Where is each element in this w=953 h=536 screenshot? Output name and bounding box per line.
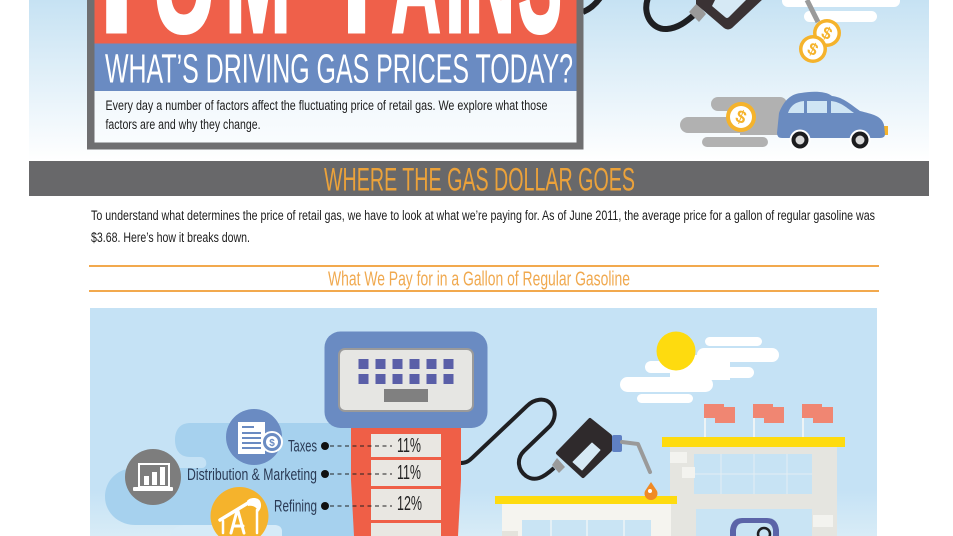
clouds behind labels [105,423,360,536]
roof [662,437,845,447]
intro text: Every day a number of factors affect the fluctuating price of retail gas. We explore what those [106,98,548,113]
icon: fuel nozzle [552,420,658,500]
car in garage [730,518,779,536]
title [99,0,562,65]
back gas station building [662,404,845,536]
pump price cells [371,434,441,536]
intro text: factors are and why they change. [106,117,260,132]
front gas station building [495,496,677,536]
section heading band: WHERE THE GAS DOLLAR GOES [324,162,635,198]
breakdown labels with leader lines: Taxes [288,436,317,456]
subtitle: WHAT’S DRIVING GAS PRICES TODAY? [105,46,573,92]
breakdown labels with leader lines: 11% [397,462,421,484]
breakdown labels with leader lines: Refining [274,496,317,516]
breakdown labels with leader lines: Distribution & Marketing [187,465,317,484]
pump head [324,332,488,428]
title panel [87,0,584,150]
gas pump body [351,425,461,536]
chart heading: What We Pay for in a Gallon of Regular Gasoline [328,268,630,290]
hero clouds [782,0,900,22]
icon: money lever and coins [799,0,841,63]
icon: hero fuel nozzle [583,0,764,30]
icon: taxes: $ [269,438,275,449]
sun and clouds [620,332,779,403]
icon: money lever and coins: $ [818,23,836,44]
breakdown labels with leader lines [187,435,422,516]
icon: car with smoke and coin [680,92,888,150]
section intro text: $3.68. Here’s how it breaks down. [91,230,250,245]
breakdown labels with leader lines: 11% [397,435,421,457]
section heading band [29,161,929,198]
fuel hose [460,400,555,479]
section intro text [91,208,875,245]
intro text [106,98,548,132]
icon: money lever and coins: $ [804,39,822,60]
icon: taxes [226,409,282,465]
panel: pump illustration background [90,308,877,536]
hero sky background [29,0,929,161]
icon: distribution laptop [125,449,181,505]
breakdown labels with leader lines: 12% [397,493,422,515]
icon: refining oil derrick [210,487,268,536]
icon: car with smoke and coin: $ [733,106,749,128]
flags [704,404,833,437]
